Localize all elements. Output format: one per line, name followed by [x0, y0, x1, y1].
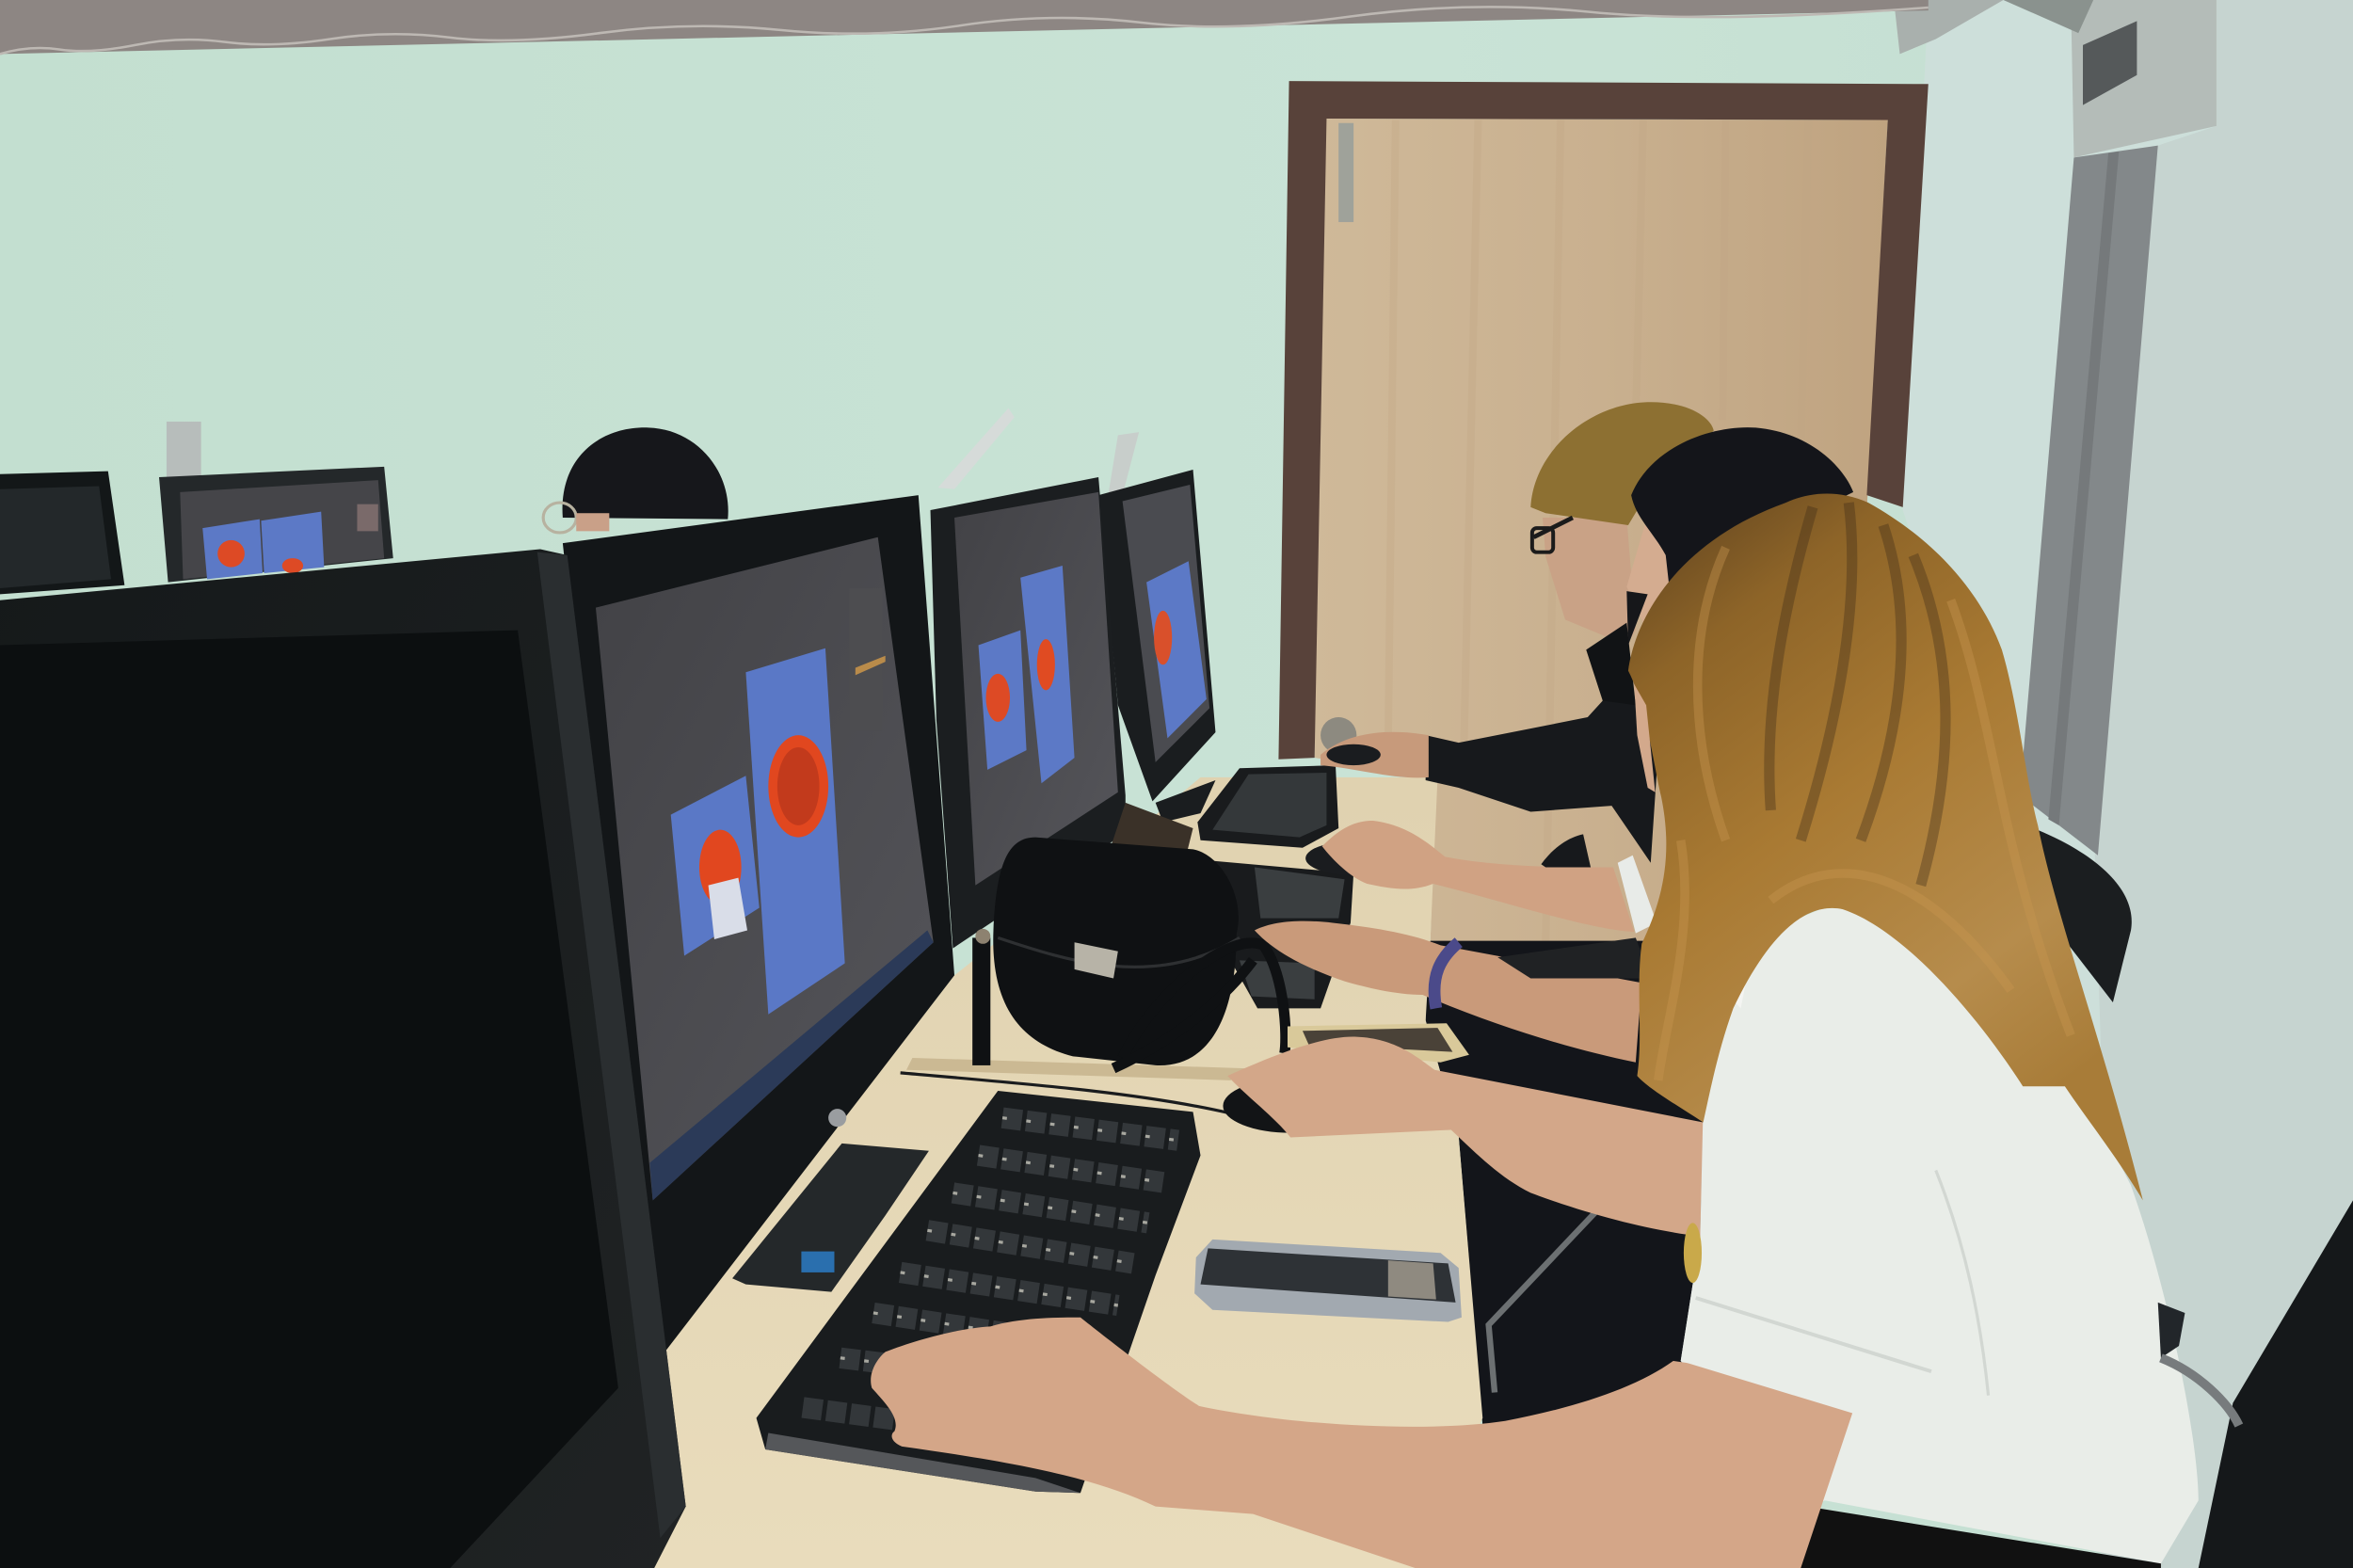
door — [1315, 119, 1888, 960]
front student face — [1634, 684, 1656, 792]
far student — [1321, 402, 1714, 863]
rear monitor with artwork — [159, 422, 393, 583]
foreground monitor — [0, 549, 686, 1568]
dark area under desk — [1426, 941, 1711, 1426]
front student hair — [1628, 493, 2143, 1200]
foreground office chair — [2158, 1200, 2353, 1568]
far right wall panel — [2095, 0, 2353, 1568]
front student arm on keyboard — [871, 1318, 1861, 1568]
front mouse and cable — [901, 1073, 1358, 1133]
black handbag — [972, 838, 1286, 1068]
far keyboard — [1197, 765, 1338, 848]
waistband — [1793, 1505, 2161, 1568]
front student white shirt — [1681, 893, 2199, 1563]
rear student head — [543, 427, 728, 533]
main monitor with artwork — [563, 495, 954, 1358]
front student arm on mouse — [1227, 1037, 1704, 1237]
middle student — [1255, 427, 1853, 1063]
main monitor stand — [732, 1144, 929, 1292]
front keyboard — [757, 1091, 1201, 1493]
pin on shirt — [1684, 1223, 1702, 1283]
second keyboard — [1201, 860, 1353, 1008]
door frame — [1278, 81, 1929, 760]
right side wall — [1903, 0, 2353, 1568]
smartphone on desk — [1194, 1240, 1462, 1322]
desk — [648, 777, 1482, 1568]
conduit column — [2020, 146, 2158, 856]
second phone — [1288, 1023, 1469, 1063]
far monitor — [1098, 432, 1215, 823]
front student collar — [1706, 949, 1753, 1008]
front student sleeve — [1681, 975, 1989, 1429]
middle monitor — [931, 408, 1193, 949]
electrical panel — [2004, 0, 2217, 157]
wall unit and wires — [1894, 0, 2004, 54]
window blind — [0, 0, 1929, 54]
rear chair backs — [1489, 825, 2132, 1392]
rear left monitor — [0, 472, 124, 594]
